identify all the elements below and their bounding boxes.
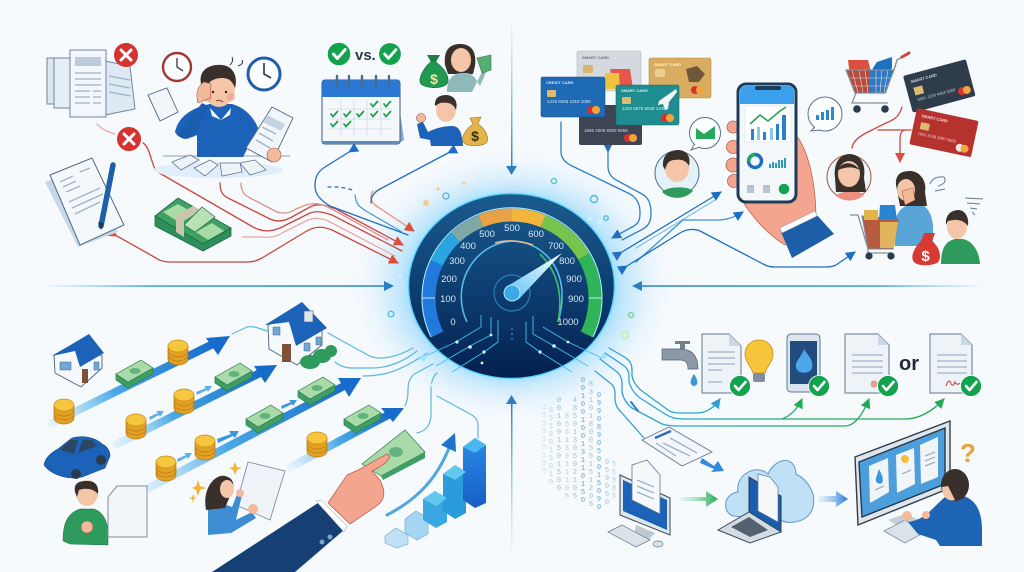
- figure: man with money bag: [416, 95, 488, 146]
- icon: house 2 with bushes: [265, 302, 337, 369]
- icon: monitor with bill panels: [855, 421, 950, 543]
- blue arrows: [561, 122, 855, 267]
- gauge score band: [429, 215, 595, 334]
- gauge scale labels: 300: [449, 256, 465, 267]
- glowing particles: [387, 175, 607, 394]
- icon: gas app on phone: [787, 334, 830, 396]
- figure: stressed man at desk: [153, 57, 293, 178]
- cash stacks: [116, 360, 381, 433]
- gauge scale labels: 100: [440, 294, 456, 305]
- icon: cloud and laptop: [718, 460, 814, 543]
- panel: top-right, credit cards and utilisation: [541, 51, 983, 267]
- gauge scale labels: 1000: [557, 317, 579, 328]
- binary data columns: 8310180055151205: [587, 381, 595, 509]
- binary data columns: 85613911105: [563, 413, 571, 501]
- gauge scale labels: 700: [548, 241, 564, 252]
- arrow: payment trend 1: [48, 336, 230, 425]
- card: tilted dark card: [903, 59, 976, 113]
- arrow: payment trend 3: [147, 378, 361, 489]
- text: card name: SMART CARD: [654, 62, 681, 67]
- figure: hand holding phone: [726, 84, 834, 258]
- icon: desktop with document: [608, 460, 670, 547]
- arrow: payment trend 4: [287, 408, 404, 469]
- icon: speech bubble mail: [690, 118, 720, 150]
- arrow: statement to cloud: [700, 458, 724, 472]
- icon: clock dark red: [163, 53, 191, 81]
- gauge scale labels: 0: [450, 317, 456, 328]
- card: gold: [649, 58, 711, 98]
- figure: person at monitor: [902, 469, 982, 546]
- axis: left horizontal arrow: [48, 281, 394, 291]
- connector lines to gauge: [232, 327, 478, 438]
- axis: bottom vertical arrow: [506, 395, 517, 552]
- gauge rim and tick dividers: [422, 208, 602, 337]
- label: vs.: vs.: [355, 47, 376, 64]
- gauge glow background: [344, 144, 680, 428]
- binary data columns: [540, 377, 618, 512]
- text: card number: 1419 9405 1010 1090: [547, 99, 591, 104]
- blue arrows: [315, 152, 448, 235]
- text: card name: SMART CARD: [921, 113, 948, 124]
- binary data columns: 199810100: [540, 404, 548, 476]
- gauge needle: [504, 253, 562, 301]
- gauge scale labels: [440, 223, 584, 328]
- text: card name: SMART CARD: [582, 55, 609, 60]
- gauge scale labels: 600: [528, 229, 544, 240]
- icon: statement on tilted sheet: [642, 427, 712, 466]
- figure: man avatar: [655, 150, 699, 198]
- figure: woman with money bag: [420, 44, 491, 92]
- icon: comparison checks: [327, 42, 401, 66]
- coins: [54, 340, 327, 481]
- icon: speech bubble chart: [808, 97, 842, 131]
- figure: woman avatar: [827, 154, 871, 201]
- figure: woman with paper: [189, 462, 285, 535]
- figure: worried woman, boy and full cart: [850, 171, 983, 265]
- binary data columns: 059050: [603, 459, 611, 507]
- icon: calendar with checks: [322, 76, 404, 145]
- text: card number: 1665 2009 5000 5659: [584, 128, 628, 133]
- gauge scale labels: 500: [479, 229, 495, 240]
- text: card number: 5001 1200 4404 5009: [917, 87, 957, 102]
- figure: hand in suit passing cash: [212, 430, 425, 572]
- connector lines from gauge: [595, 348, 944, 438]
- binary data columns: 099089050015090: [595, 392, 603, 512]
- icon: question mark: ?: [960, 438, 976, 468]
- red arrows to gauge: [97, 124, 414, 263]
- gauge scale labels: 500: [504, 223, 520, 234]
- symbol: dollar: $: [430, 71, 438, 87]
- arrow: payment trend 2: [113, 365, 277, 446]
- text: card name: SMART CARD: [910, 72, 937, 84]
- arrow: green transfer: [680, 491, 718, 507]
- icon: clock blue: [248, 58, 280, 90]
- axis: right horizontal arrow: [632, 281, 980, 291]
- small arrows: [149, 386, 297, 462]
- text: card number: 1001 5109 3097 5603: [917, 131, 957, 144]
- icon: water bill: [702, 334, 750, 396]
- card: teal travel card: [616, 85, 679, 125]
- gauge scale labels: 800: [559, 256, 575, 267]
- icon: water tap: [662, 341, 698, 386]
- red arrows: [852, 107, 911, 162]
- phone: [738, 84, 796, 202]
- binary data columns: 4850130502105: [571, 397, 579, 501]
- card: blue credit card: [541, 77, 605, 117]
- icon: document with signature: [930, 334, 982, 396]
- text: card name: SMART CARD: [621, 88, 648, 93]
- circuit traces: [421, 315, 602, 372]
- card: silver shopping card: [577, 51, 641, 91]
- arrow: growth: [387, 440, 452, 515]
- icon: stack of cash with band: [155, 198, 231, 251]
- binary data columns: 55985: [610, 461, 618, 501]
- panel: bottom-left, credit-building repayments: [44, 302, 486, 572]
- binary data columns: 001001501500: [555, 397, 563, 493]
- text: card number: 1325 5678 5049 1109: [622, 106, 666, 111]
- symbol: dollar: $: [471, 128, 479, 144]
- card: dark: [579, 105, 642, 145]
- icon: growth head: [441, 433, 456, 452]
- glowing rings: [388, 178, 633, 339]
- icon: document with stamp: [845, 334, 898, 396]
- icon: second red cross badge: [117, 127, 141, 151]
- gauge disk: [408, 192, 616, 380]
- icon: small loose document: [148, 88, 178, 121]
- icon: document and pen: [45, 158, 124, 247]
- gauge: central speedometer: [387, 175, 633, 394]
- gauge scale labels: 400: [460, 241, 476, 252]
- icon: red cross badge: [114, 43, 138, 67]
- card: tilted red card: [909, 108, 979, 157]
- chart: isometric rising bars: [385, 438, 486, 548]
- binary data columns: 0010010013110150: [579, 377, 587, 505]
- icon: shopping cart with bags: [846, 53, 909, 113]
- text: card name: CREDIT CARD: [546, 80, 574, 85]
- label: or: or: [899, 353, 919, 375]
- arrow: blue transfer: [818, 491, 848, 507]
- symbol: dollar: $: [921, 248, 930, 265]
- binary data columns: 6519015010: [547, 407, 555, 487]
- gauge scale labels: 900: [566, 274, 582, 285]
- axis: top vertical arrow: [506, 20, 517, 175]
- figure: man with blank paper: [63, 480, 147, 545]
- icon: stack of documents: [47, 50, 135, 117]
- gauge scale labels: 200: [441, 274, 457, 285]
- icon: light bulb: [745, 340, 773, 382]
- icon: house 1: [52, 334, 104, 387]
- panel: top-left, payment history: [45, 42, 491, 263]
- panel: bottom-right, utility bills and data reporting: [540, 334, 982, 547]
- gauge scale labels: 900: [568, 294, 584, 305]
- icon: car: [44, 437, 110, 479]
